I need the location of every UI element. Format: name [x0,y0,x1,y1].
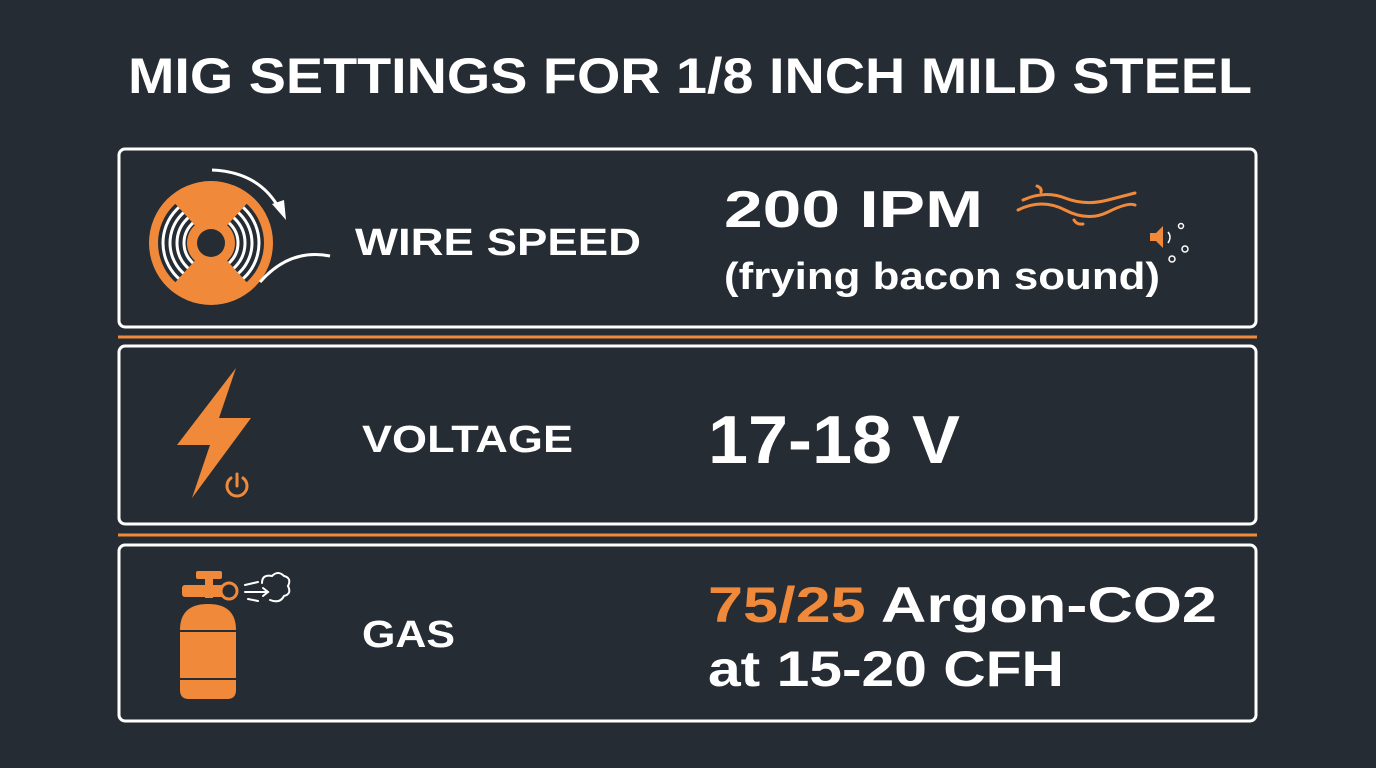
value: 200 IPM: 200 IPM [724,181,983,239]
icon: lightning bolt [177,368,251,498]
note: frying bacon sound: (frying bacon sound) [724,256,1160,298]
icon: speaker [1150,224,1188,262]
icon: wire spool [0,0,330,305]
title: MIG SETTINGS FOR 1/8 INCH MILD STEEL [128,48,1252,104]
panel: wire speed [0,0,1256,327]
label: gas: GAS [362,614,455,656]
label: wire speed: WIRE SPEED [355,222,641,264]
value: flow rate: at 15-20 CFH [708,641,1064,697]
value: 17-18 V: 17-18 V [708,402,960,478]
icon: gas cylinder [180,571,289,699]
panel: gas [119,545,1256,721]
label: voltage: VOLTAGE [362,419,573,461]
panel: voltage [119,346,1256,524]
icon: sizzle waves [1018,186,1135,224]
value: gas mix: 75/25 Argon-CO2 [708,577,1217,633]
